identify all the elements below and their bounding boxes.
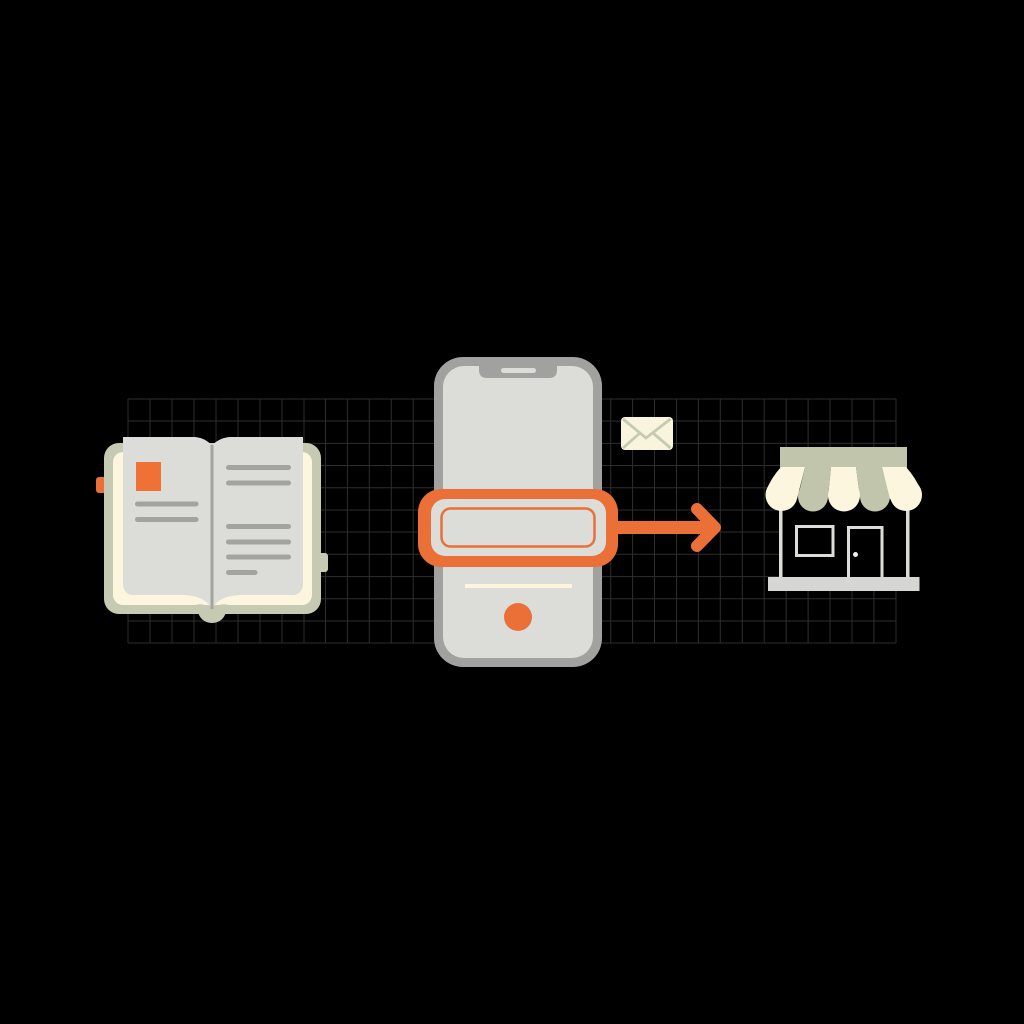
phone notch [479, 366, 557, 378]
awning stripe 4 [856, 467, 890, 512]
awning top band [780, 447, 907, 468]
band inner panel [431, 499, 606, 556]
icon: envelope [621, 417, 673, 450]
background grid [128, 399, 896, 643]
book page block [113, 452, 312, 605]
left page [123, 437, 212, 609]
store base [768, 577, 920, 591]
right page text lines [226, 465, 291, 575]
phone screen [443, 366, 593, 658]
band input outline [442, 508, 594, 546]
store window [796, 526, 833, 556]
phone body [434, 357, 602, 667]
icon: storefront [766, 447, 922, 591]
awning stripe 2 [798, 467, 831, 512]
store interior [781, 447, 908, 577]
book right ribbon tab [315, 553, 328, 572]
right page [212, 437, 303, 609]
phone cream line [465, 584, 572, 588]
book cover [104, 443, 321, 614]
book centre fold [210, 445, 214, 609]
awning stripe 5 [882, 467, 922, 511]
left page text lines [135, 502, 198, 522]
book spine bump [198, 608, 226, 623]
icon: smartphone [418, 357, 618, 667]
cover wedge under the fold [192, 604, 232, 614]
store posts [779, 505, 910, 578]
book left ribbon tab [96, 477, 110, 493]
orange picture square [136, 462, 161, 491]
awning stripe 1 [766, 467, 805, 511]
icon: open book [96, 437, 328, 623]
door knob [853, 552, 858, 557]
phone speaker [501, 368, 536, 373]
store door [848, 528, 882, 578]
arrow: phone to store [610, 509, 715, 546]
phone orange button [504, 603, 532, 631]
orange highlighted band [418, 489, 618, 567]
awning stripe 3 [828, 467, 860, 512]
